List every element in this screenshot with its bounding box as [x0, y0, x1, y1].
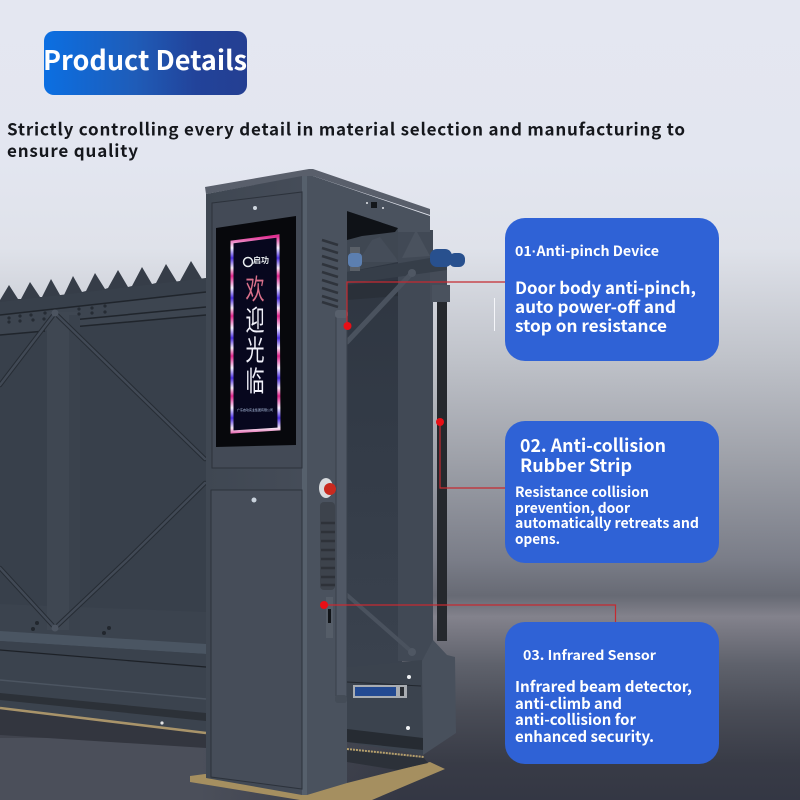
- panel: anti-collision rubber strip: 02. Anti-collision: [520, 432, 666, 458]
- gate lower band: [0, 604, 206, 645]
- gate shadow: [0, 708, 206, 748]
- panel: infrared sensor: enhanced security.: [515, 726, 654, 747]
- top camera slot: [366, 202, 384, 209]
- panel: anti-pinch device: auto power-off and: [515, 294, 676, 318]
- gate post: [190, 169, 465, 800]
- front face: [206, 176, 302, 795]
- connector: anti-pinch: [344, 282, 505, 330]
- nameplate: [353, 685, 407, 698]
- small white tick: [494, 298, 495, 331]
- panel: anti-collision rubber strip: [505, 421, 719, 563]
- display slogan: 光: [245, 327, 265, 368]
- upper door panel: [212, 192, 302, 468]
- gate spikes: [0, 261, 206, 320]
- rear bracket column: [430, 262, 447, 302]
- post top right beam: [347, 258, 447, 284]
- display logo: 启功: [253, 255, 269, 266]
- panel: infrared sensor: anti-collision for: [515, 709, 636, 730]
- door knobs: [253, 206, 257, 210]
- intro text: [7, 116, 685, 162]
- LED display: 广东启功实业集团有限公司: [237, 407, 273, 412]
- title badge: [43, 31, 247, 95]
- post right side inner: [347, 205, 402, 668]
- title badge: Product Details: [43, 39, 247, 78]
- side vent: [322, 240, 338, 307]
- gate rack: [0, 708, 206, 733]
- corner column and side wall: [303, 176, 430, 795]
- panel: anti-pinch device: 01·Anti-pinch Device: [515, 241, 659, 261]
- infrared sensor: [326, 597, 333, 638]
- sliding gate: [0, 261, 206, 748]
- panel: anti-pinch device: Door body anti-pinch,: [515, 275, 696, 299]
- lower door panel: [211, 490, 302, 789]
- panel: anti-pinch device: stop on resistance: [515, 313, 667, 337]
- intro text: ensure quality: [7, 137, 138, 162]
- panel: infrared sensor: Infrared beam detector,: [515, 676, 692, 697]
- panel: anti-collision rubber strip: prevention, door: [515, 498, 631, 518]
- vertical anti-pinch tube: [335, 310, 348, 703]
- cap: [205, 169, 430, 215]
- gate rivets: [7, 304, 107, 324]
- panel: infrared sensor: anti-climb and: [515, 693, 622, 714]
- inner panel step: [398, 230, 433, 661]
- gate panel: [0, 278, 206, 734]
- display slogan: 临: [245, 358, 265, 399]
- display slogan: 欢: [245, 266, 265, 307]
- display slogan: 迎: [245, 297, 265, 338]
- intro text: Strictly controlling every detail in material selection and manufacturing to: [7, 116, 685, 140]
- inner diagonal arms: [347, 269, 416, 656]
- panel: anti-collision rubber strip: opens.: [515, 529, 560, 549]
- panel: infrared sensor: [505, 622, 719, 764]
- base plate: [190, 762, 445, 800]
- lower housing: [347, 640, 456, 770]
- panel: infrared sensor: 03. Infrared Sensor: [523, 644, 656, 664]
- ribbed strip: [320, 502, 335, 590]
- emergency stop button: [319, 478, 336, 498]
- connector: rubber strip: [436, 418, 505, 488]
- floor: [0, 738, 400, 800]
- panel: anti-collision rubber strip: Resistance collision: [515, 482, 649, 502]
- display logo: [244, 255, 269, 266]
- display slogan: [245, 266, 265, 399]
- panel: anti-collision rubber strip: automatically retreats and: [515, 513, 699, 533]
- blue rollers: [348, 247, 465, 271]
- gate braces: [0, 313, 205, 628]
- panel: anti-pinch device: [505, 218, 719, 361]
- panel: anti-collision rubber strip: Rubber Strip: [520, 452, 632, 478]
- anti-collision rubber strip: [432, 285, 450, 641]
- LED display: [216, 216, 296, 447]
- inner spikes: [358, 237, 398, 262]
- gate bottom rail: [0, 631, 206, 654]
- connector: infrared sensor: [320, 601, 616, 622]
